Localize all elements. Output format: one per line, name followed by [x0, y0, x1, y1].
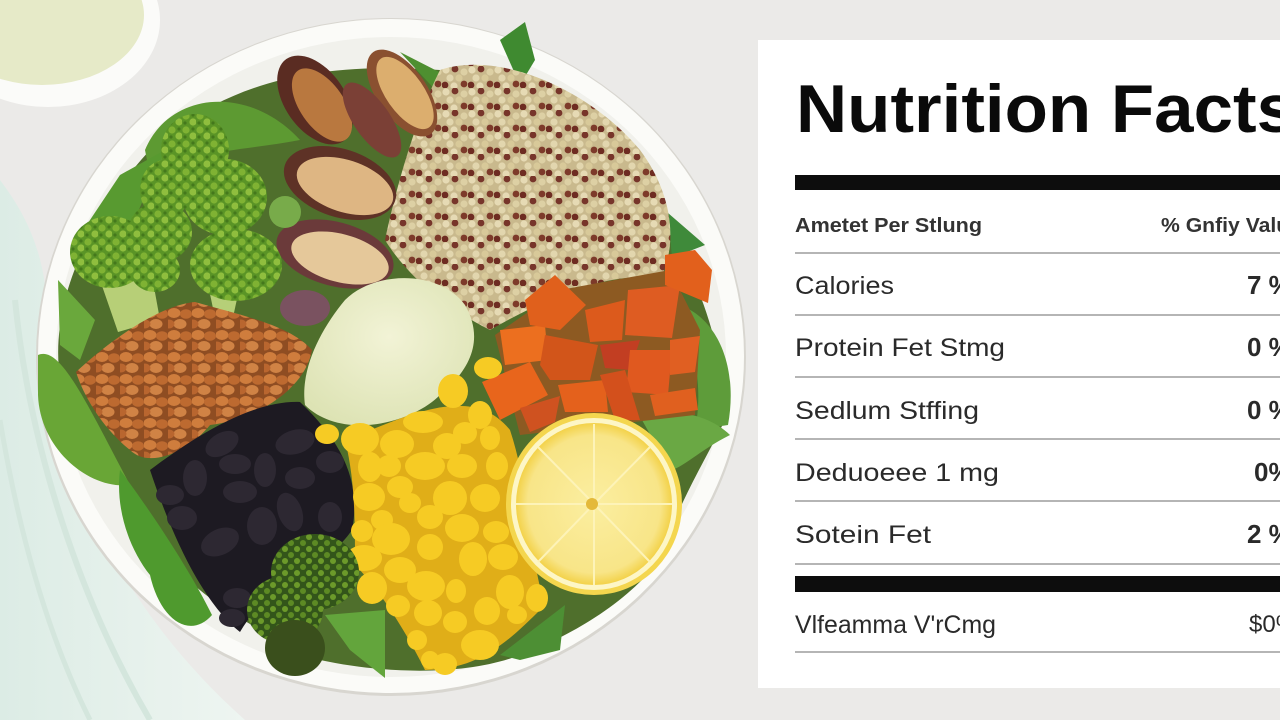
lentils	[76, 302, 312, 458]
row: protein fat: Protein Fet Stmg	[795, 334, 1005, 362]
column headings: Ametet Per Stlung	[795, 215, 982, 237]
nutrition facts panel	[758, 40, 1280, 688]
lemon slice	[506, 413, 682, 595]
large salad bowl	[36, 18, 746, 696]
creamy sauce dollop	[304, 278, 474, 425]
row: deduction: Deduoeee 1 mg	[795, 459, 999, 487]
corn kernels	[315, 357, 548, 675]
row: calories	[795, 270, 1280, 300]
sweet potato cubes	[482, 250, 712, 435]
quinoa	[385, 65, 670, 330]
row: vitamins	[795, 611, 1280, 639]
row: sodium	[795, 395, 1280, 425]
mixed food base layer	[58, 68, 725, 671]
roasted vegetable slices	[262, 38, 451, 326]
panel title: Nutrition Facts	[796, 71, 1280, 147]
row: vitamins: Vlfeamma V'rCmg	[795, 611, 996, 639]
small sauce bowl	[0, 0, 160, 107]
column headings	[795, 215, 1280, 237]
broccoli top left	[70, 114, 301, 332]
greens	[38, 22, 731, 678]
row: sotein fat	[795, 519, 1280, 549]
black beans	[150, 402, 354, 632]
row: sotein fat: Sotein Fet	[795, 521, 931, 549]
row: sodium: Sedlum Stffing	[795, 397, 979, 425]
thick lower rule	[795, 576, 1280, 592]
thick top rule	[795, 175, 1280, 190]
broccoli bottom	[247, 534, 359, 676]
row: protein fat	[795, 332, 1280, 362]
row: calories: Calories	[795, 272, 894, 300]
row: deduction	[795, 457, 1280, 487]
cloth napkin	[0, 180, 245, 720]
